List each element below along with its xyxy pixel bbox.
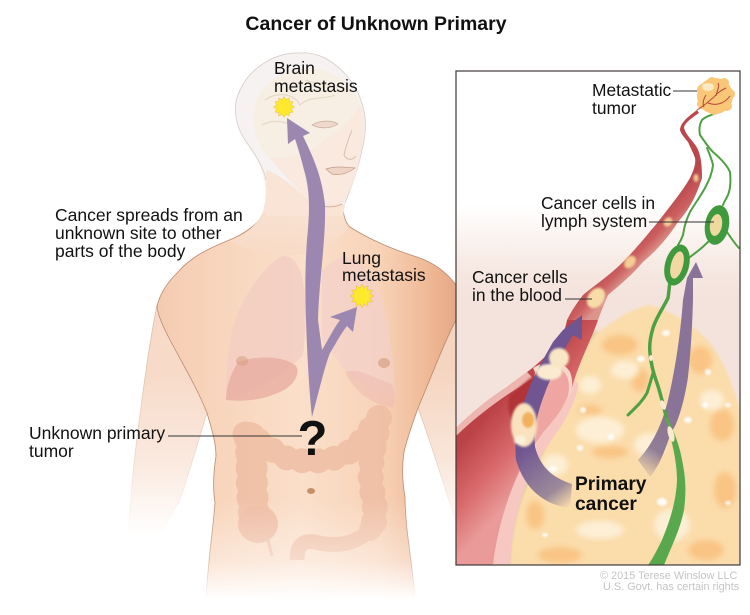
liver bbox=[226, 357, 297, 401]
colon bbox=[238, 418, 379, 560]
brain folds bbox=[262, 80, 335, 130]
stomach bbox=[345, 371, 395, 408]
label: lung metastasis: metastasis bbox=[342, 265, 426, 285]
leader line: blood bbox=[565, 298, 592, 300]
label: cancer spreads: unknown site to other bbox=[55, 223, 222, 243]
face bbox=[268, 104, 365, 207]
label: cancer spreads: Cancer spreads from an bbox=[55, 205, 243, 225]
label: cancer cells in lymph system: lymph system bbox=[541, 211, 647, 231]
neck bbox=[231, 186, 348, 246]
chin line bbox=[318, 204, 342, 207]
vessel dark interior bbox=[508, 374, 534, 418]
vessel pale outer wall bbox=[493, 378, 578, 565]
nose bbox=[344, 130, 356, 159]
blood vessel: lower wide part bbox=[456, 320, 598, 565]
head bbox=[235, 53, 366, 216]
inset frame bbox=[456, 71, 740, 565]
cancer cells in the blood bbox=[583, 174, 698, 312]
vessel upper pale rim bbox=[456, 372, 533, 436]
label: lung metastasis: Lung bbox=[342, 248, 381, 268]
icon: lung metastasis star bbox=[350, 284, 374, 308]
inset background bbox=[456, 71, 740, 565]
cancer cells in lymph vessel bbox=[649, 355, 676, 443]
head fill with hair bbox=[235, 53, 366, 205]
eye bbox=[312, 121, 338, 128]
arrow: through lymph system bbox=[638, 262, 703, 477]
arrow: spread from question mark to brain and lung bbox=[287, 118, 357, 417]
label: primary cancer: cancer bbox=[575, 494, 637, 515]
label: cancer cells in the blood: Cancer cells bbox=[472, 267, 568, 287]
question mark: ? bbox=[298, 412, 327, 466]
right arm bbox=[418, 322, 456, 520]
vessel inner opening bbox=[534, 370, 569, 445]
label: cancer cells in lymph system: Cancer cells in bbox=[541, 193, 655, 213]
left arm bbox=[128, 305, 207, 540]
vessel opening rim bbox=[533, 362, 572, 400]
label: cancer spreads: parts of the body bbox=[55, 241, 186, 261]
icon: brain metastasis star bbox=[274, 96, 294, 118]
lymph node lower bbox=[664, 244, 690, 286]
leader line: metastatic tumor bbox=[673, 90, 697, 92]
label: cancer cells in the blood: in the blood bbox=[472, 285, 562, 305]
leader line: lymph system bbox=[649, 221, 714, 223]
lymph node upper bbox=[704, 205, 730, 245]
navel bbox=[307, 488, 315, 494]
lung right bbox=[322, 257, 395, 398]
label: unknown primary tumor: Unknown primary bbox=[29, 423, 165, 443]
brain bbox=[254, 68, 360, 158]
title: Cancer of Unknown Primary bbox=[245, 13, 507, 35]
label: primary cancer: Primary bbox=[575, 474, 647, 495]
label: unknown primary tumor: tumor bbox=[29, 441, 74, 461]
left nipple bbox=[236, 356, 248, 366]
head outline bbox=[235, 53, 366, 203]
lung left bbox=[236, 256, 306, 366]
copyright: U.S. Govt. has certain rights bbox=[603, 581, 740, 593]
figure: human body with organs bbox=[157, 170, 456, 600]
jaw blend into neck bbox=[266, 170, 345, 216]
cancer cell cluster in vessel large bbox=[511, 403, 537, 447]
lymph vessel thick part bbox=[648, 418, 685, 565]
arrow: through the blood vessel bbox=[515, 315, 582, 508]
cancer cell cluster in vessel middle bbox=[536, 348, 569, 380]
label: metastatic tumor: tumor bbox=[592, 98, 637, 118]
label: metastatic tumor: Metastatic bbox=[592, 80, 672, 100]
blood vessel: upper narrowing part bbox=[567, 110, 702, 320]
label: brain metastasis: metastasis bbox=[274, 76, 358, 96]
shadow around cancer mass bbox=[510, 333, 597, 565]
torso bbox=[157, 210, 456, 600]
primary cancer mass bbox=[510, 305, 740, 565]
copyright: © 2015 Terese Winslow LLC bbox=[600, 570, 738, 582]
metastatic tumor bbox=[697, 77, 735, 115]
panel: inset of primary cancer spreading bbox=[456, 71, 740, 565]
right nipple bbox=[378, 358, 390, 368]
label: brain metastasis: Brain bbox=[274, 58, 315, 78]
mouth bbox=[326, 167, 355, 175]
lymph vessels bbox=[628, 113, 739, 420]
leader line: unknown primary tumor bbox=[168, 435, 302, 437]
